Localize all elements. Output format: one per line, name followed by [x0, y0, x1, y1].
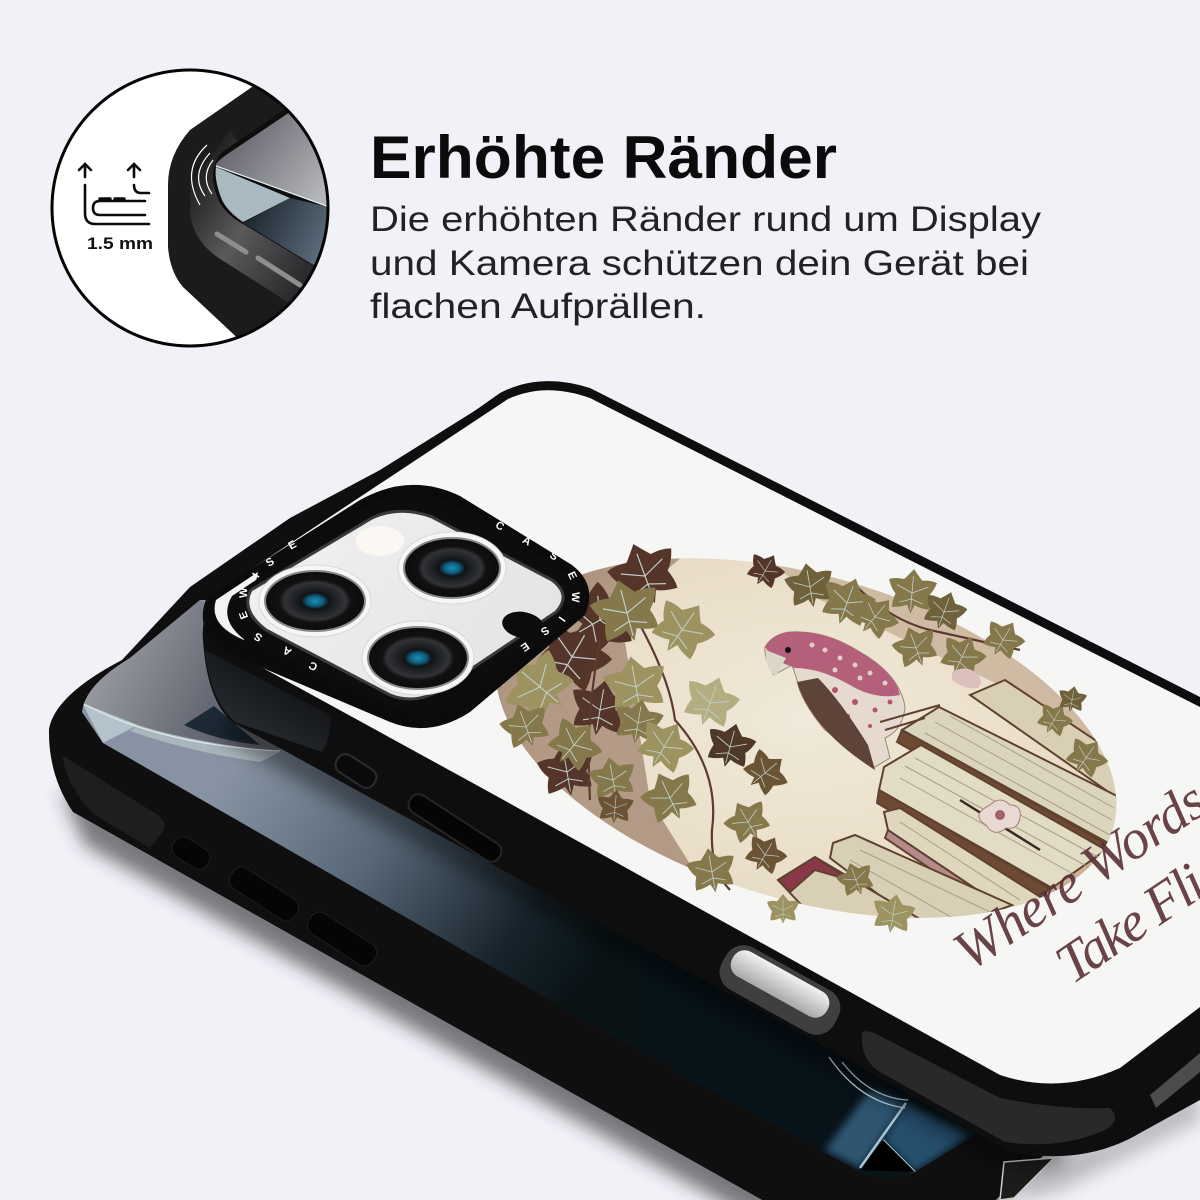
brand text on ring: E [518, 639, 531, 653]
brand text on ring: S [547, 549, 560, 563]
upper phone: shadow on lower phone [215, 640, 1060, 1165]
brand text on ring: E [237, 610, 251, 621]
shadow below the lower phone [60, 790, 1010, 1200]
brand text on ring: I [556, 614, 567, 623]
brand text on ring: W [238, 587, 250, 598]
upper phone: power button [405, 791, 505, 865]
body text: und Kamera schützen dein Gerät bei [370, 244, 1029, 283]
lower phone: carbon corner [62, 755, 165, 848]
bird [765, 632, 940, 770]
pink flower on top right [952, 668, 981, 688]
brand text on ring: I [250, 571, 262, 580]
lower phone: light beams [825, 1057, 970, 1172]
brand text on ring: E [565, 570, 579, 582]
upper phone: case frame [203, 381, 1200, 1156]
inset circle: raised edge detail [52, 70, 345, 346]
ivy stems [589, 585, 1020, 890]
upper phone: grey hatch at right corner [1150, 1053, 1200, 1108]
body text: Die erhöhten Ränder rund um Display [370, 200, 1042, 239]
illustration: bird, books and ivy [480, 532, 1130, 940]
body text [370, 200, 1042, 326]
flash [356, 526, 404, 556]
camera bump [203, 485, 589, 728]
brand text on ring: E [286, 538, 299, 552]
brand text on ring: W [569, 592, 581, 603]
brand text on ring: S [252, 630, 265, 644]
body text: flachen Aufprällen. [370, 287, 706, 326]
flower on book [979, 800, 1020, 832]
bump: white margin [215, 572, 258, 640]
brand text on ring: A [281, 643, 294, 658]
upper phone: translucent corner by camera [205, 650, 330, 752]
heading: Erhöhte Ränder [370, 124, 837, 191]
upper phone: mute switch [332, 751, 380, 791]
ivy leaves [492, 559, 1114, 936]
lower phone: side button volume down [304, 908, 380, 970]
lens 2 [398, 532, 506, 604]
brand text on ring: C [493, 519, 506, 534]
bump: lens window [248, 511, 563, 699]
bump: ring face [227, 494, 583, 713]
brand text on ring: A [520, 534, 533, 549]
shadow at right corner [1000, 1090, 1200, 1200]
brand text on ring: S [264, 556, 277, 570]
lens 3 [362, 621, 474, 695]
lens 1 [259, 565, 371, 637]
brand text on ring: S [538, 623, 551, 637]
brand text on ring [237, 519, 581, 673]
lower phone: silver edge at corner [1000, 1158, 1054, 1200]
label: 1.5 mm: 1.5 mm [87, 234, 153, 253]
lower phone: case frame [49, 395, 1060, 1200]
icon: raised edge diagram [79, 164, 149, 224]
upper phone: carbon bottom corner [862, 1031, 1115, 1144]
lower phone: screen [82, 600, 972, 1175]
lower phone: side button volume up [226, 863, 302, 925]
lidar sensor [500, 609, 546, 641]
upper phone: white back [230, 390, 1200, 1084]
brand text on ring: C [307, 658, 320, 673]
ivy shadows [526, 532, 790, 800]
lower phone: side button small [168, 833, 214, 873]
upper phone: charging port [712, 938, 848, 1042]
books [778, 680, 1125, 935]
